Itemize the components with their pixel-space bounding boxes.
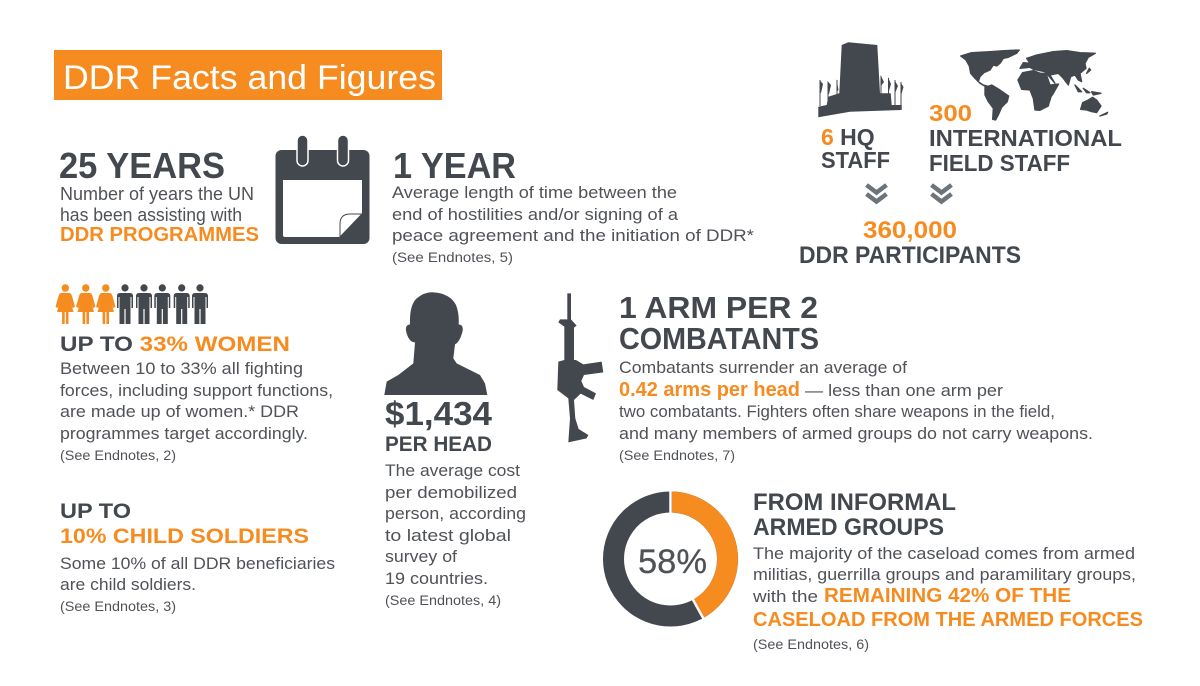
block: 25 years: Number of years the UN (60, 184, 254, 204)
icon: rifle (557, 293, 603, 442)
block: 25 years: DDR PROGRAMMES (60, 224, 259, 246)
block: informal armed groups: with the (752, 587, 818, 606)
block: international field staff: FIELD STAFF (929, 150, 1070, 176)
block: informal armed groups: CASELOAD FROM THE ARMED FORCES (753, 609, 1143, 631)
block: 1 year: (See Endnotes, 5) (392, 250, 513, 265)
block: 1 arm per 2 combatants: 1 ARM PER 2 (619, 290, 818, 325)
block: cost per head: (See Endnotes, 4) (385, 593, 501, 608)
block: cost per head: survey of (385, 547, 457, 566)
block: up to 33% women: programmes target accordingly. (60, 424, 308, 443)
block: international field staff (929, 100, 1122, 176)
block: 1 arm per 2 combatants: — less than one arm per (805, 381, 1003, 400)
block: international field staff: 300 (929, 100, 972, 126)
block: HQ staff (821, 124, 890, 173)
block: informal armed groups (752, 489, 1143, 652)
icon: UN headquarters (818, 42, 904, 117)
block: 1 arm per 2 combatants: Combatants surrender an average of (619, 358, 907, 377)
block: cost per head: The average cost (385, 461, 520, 480)
icon: head silhouette (384, 292, 487, 395)
block: up to 10% child soldiers: (See Endnotes, 3) (60, 599, 176, 614)
block: HQ staff: 6 HQ (821, 124, 875, 150)
block: up to 33% women: (See Endnotes, 2) (60, 448, 176, 463)
block: cost per head: $1,434 (385, 395, 493, 432)
block: cost per head: 19 countries. (385, 569, 488, 588)
block: DDR participants (799, 217, 1021, 269)
block: 25 years (59, 145, 259, 246)
block: 1 arm per 2 combatants: COMBATANTS (619, 321, 819, 356)
icon: world map (961, 50, 1108, 120)
donut chart: 58% (614, 490, 738, 620)
block: 1 arm per 2 combatants: and many members of armed groups do not carry weapons. (619, 424, 1093, 443)
block: up to 10% child soldiers (60, 500, 335, 614)
block: cost per head: person, according (385, 504, 526, 523)
block: up to 33% women: forces, including support functions, (60, 381, 333, 400)
block: up to 33% women: are made up of women.* DDR (60, 402, 299, 421)
block: informal armed groups: The majority of the caseload comes from armed (753, 544, 1135, 563)
block: 25 years: 25 YEARS (59, 145, 225, 186)
block: 1 arm per 2 combatants: two combatants. Fighters often share weapons in the field, (619, 402, 1055, 421)
block: up to 33% women (60, 333, 333, 463)
block: informal armed groups: ARMED GROUPS (753, 514, 944, 541)
block: up to 10% child soldiers: UP TO (60, 500, 131, 523)
block: HQ staff: STAFF (821, 147, 890, 173)
icon: chevrons right (932, 185, 952, 202)
block: up to 10% child soldiers: 10% CHILD SOLDIERS (60, 525, 309, 548)
block: 1 arm per 2 combatants: (See Endnotes, 7) (619, 448, 735, 463)
block: 1 year: end of hostilities and/or signing of a (392, 205, 679, 224)
block: cost per head: per demobilized (385, 483, 517, 502)
block: 1 year (392, 145, 754, 265)
block: DDR participants: DDR PARTICIPANTS (799, 242, 1021, 269)
block: DDR participants: 360,000 (863, 217, 957, 244)
block: 1 year: peace agreement and the initiation of DDR* (392, 226, 754, 245)
donut chart: 58%: 58% (638, 543, 707, 581)
block: cost per head: to latest global (385, 526, 511, 545)
icon: calendar (276, 135, 370, 244)
block: informal armed groups: FROM INFORMAL (753, 489, 956, 516)
block: cost per head: PER HEAD (385, 433, 492, 456)
block: up to 33% women: Between 10 to 33% all fighting (60, 359, 303, 378)
block: 1 arm per 2 combatants: 0.42 arms per head (619, 379, 800, 401)
block: informal armed groups: militias, guerrilla groups and paramilitary groups, (753, 565, 1136, 584)
block: informal armed groups: (See Endnotes, 6) (753, 637, 869, 652)
block: up to 10% child soldiers: are child soldiers. (60, 575, 196, 594)
block: cost per head (385, 395, 526, 608)
title banner: DDR Facts and Figures (63, 59, 436, 97)
title banner (54, 50, 442, 100)
block: informal armed groups: REMAINING 42% OF THE (824, 585, 1071, 607)
block: international field staff: INTERNATIONAL (929, 125, 1122, 151)
block: 1 arm per 2 combatants (619, 290, 1093, 463)
icon: people row (56, 284, 208, 324)
block: 1 year: Average length of time between the (392, 183, 677, 202)
block: 1 year: 1 YEAR (393, 145, 516, 186)
block: up to 10% child soldiers: Some 10% of all DDR beneficiaries (60, 554, 335, 573)
block: 25 years: has been assisting with (60, 205, 242, 225)
icon: chevrons left (866, 185, 886, 202)
block: up to 33% women: UP TO 33% WOMEN (60, 333, 290, 356)
